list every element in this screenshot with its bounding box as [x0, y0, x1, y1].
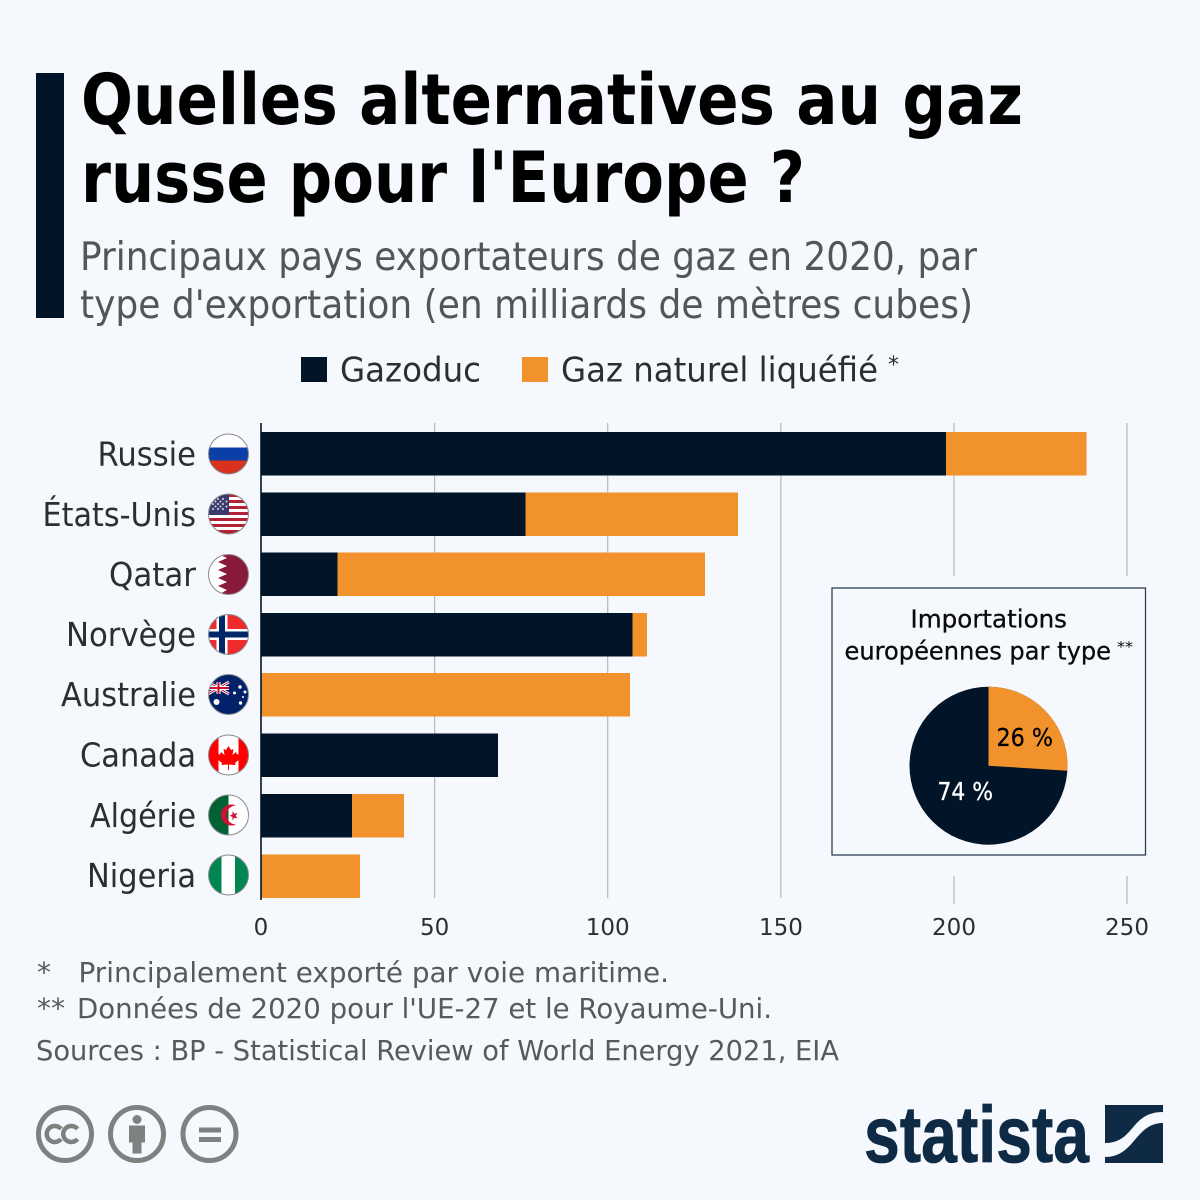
- inset heading: européennes par type: [844, 636, 1111, 666]
- legend: gaz naturel liquéfié: *: [888, 353, 899, 378]
- footnotes: **: [37, 992, 65, 1025]
- icon: flag Algeria: [208, 795, 250, 836]
- bar chart: [42, 423, 1149, 941]
- subtitle: type d'exportation (en milliards de mètres cubes): [80, 283, 973, 328]
- country labels: Russie: [98, 434, 196, 474]
- country labels: Nigeria: [87, 856, 196, 895]
- legend: [301, 350, 899, 390]
- inset heading: Importations: [910, 604, 1067, 634]
- x axis labels: 150: [759, 915, 803, 941]
- logo: statista mark: [1105, 1105, 1163, 1163]
- country labels: Norvège: [66, 615, 196, 654]
- pie chart: 74 %: [938, 777, 993, 806]
- icon: flag Australia: [208, 674, 249, 715]
- country labels: Algérie: [90, 796, 196, 835]
- subtitle: Principaux pays exportateurs de gaz en 2020, par: [80, 235, 978, 280]
- title: Quelles alternatives au gaz: [81, 59, 1023, 141]
- footnotes: Principalement exporté par voie maritime.: [78, 956, 669, 989]
- icon: attribution: [110, 1108, 164, 1160]
- footnotes: *: [37, 956, 51, 989]
- y axis: [260, 423, 262, 900]
- bar: Algérie: [261, 794, 404, 838]
- x axis labels: 100: [586, 915, 630, 941]
- inset heading: [844, 604, 1134, 666]
- subtitle: [80, 235, 978, 328]
- footnotes: [36, 956, 839, 1067]
- icon: flag Nigeria: [208, 855, 249, 896]
- icon: flag Russia: [208, 434, 249, 474]
- icon: flag Canada: [208, 735, 249, 776]
- panel: pie inset: [832, 588, 1146, 855]
- x axis labels: 250: [1105, 915, 1149, 941]
- country labels: [42, 434, 196, 895]
- bar: Qatar: [261, 552, 705, 596]
- bar: Canada: [261, 734, 498, 777]
- bar: Russie: [261, 432, 1086, 476]
- pie chart: 26 %: [996, 723, 1053, 752]
- footnotes: Données de 2020 pour l'UE-27 et le Royaume-Uni.: [77, 992, 772, 1025]
- legend: gazoduc: Gazoduc: [340, 350, 481, 390]
- x axis labels: [254, 915, 1149, 941]
- footnotes: Sources : BP - Statistical Review of World Energy 2021, EIA: [36, 1034, 839, 1067]
- icon: flag Qatar: [208, 554, 249, 595]
- x axis labels: 0: [254, 915, 268, 941]
- bar: Australie: [261, 673, 630, 716]
- bar: États-Unis: [261, 492, 738, 536]
- bar: Nigeria: [261, 854, 360, 898]
- country labels: Canada: [80, 736, 196, 774]
- title: [81, 59, 1023, 219]
- pie chart: [910, 687, 1068, 845]
- x axis labels: 50: [420, 915, 449, 941]
- country labels: Australie: [61, 675, 196, 714]
- grid lines: [435, 423, 1127, 904]
- icon: creative commons: [38, 1108, 92, 1160]
- x axis labels: 200: [932, 915, 976, 941]
- legend: gaz naturel liquéfié: Gaz naturel liquéfié: [561, 350, 878, 390]
- icon: flag Norway: [208, 614, 249, 655]
- logo: statista wordmark: statista: [864, 1090, 1089, 1179]
- country labels: Qatar: [109, 555, 196, 594]
- title accent bar: [36, 73, 64, 318]
- icon: flag United States: [208, 494, 249, 534]
- bar: Norvège: [261, 613, 647, 656]
- icon: no derivatives: [183, 1108, 236, 1160]
- inset heading: **: [1117, 638, 1134, 656]
- title: russe pour l'Europe ?: [81, 137, 805, 219]
- country labels: États-Unis: [42, 494, 196, 534]
